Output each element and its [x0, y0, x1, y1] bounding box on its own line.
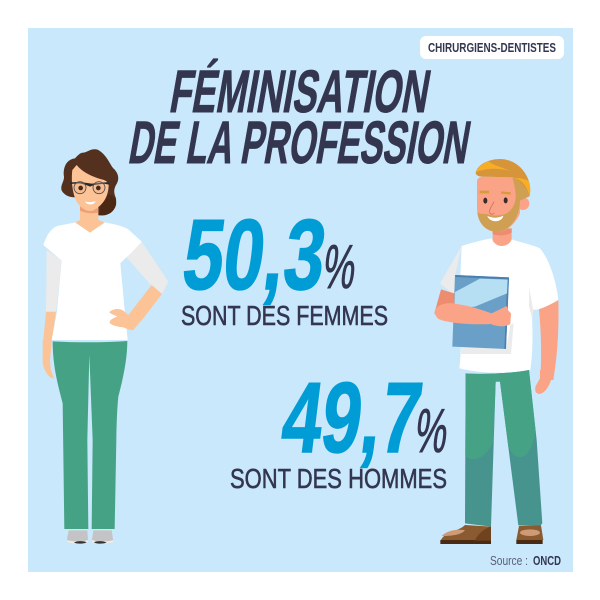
source	[490, 553, 561, 568]
statistic: men	[230, 362, 453, 494]
ear and face	[517, 197, 529, 210]
woman upper body	[43, 149, 168, 340]
statistic: men: 49,7	[276, 362, 428, 474]
statistic: women: %	[319, 233, 361, 302]
statistic: men: %	[411, 397, 453, 466]
source: Source :	[490, 553, 528, 568]
statistic: men: SONT DES HOMMES	[230, 463, 447, 494]
title: FÉMINISATION	[166, 57, 436, 125]
source: ONCD	[533, 553, 561, 568]
illustration: woman	[43, 149, 168, 544]
category badge: CHIRURGIENS-DENTISTES	[428, 40, 556, 55]
beard and sideburn	[477, 177, 530, 232]
man upper body	[434, 159, 559, 380]
category badge	[420, 36, 564, 59]
woman legs	[43, 340, 127, 544]
statistic: women: 50,3	[177, 199, 332, 311]
statistic: women: SONT DES FEMMES	[181, 300, 388, 331]
man legs	[440, 370, 553, 544]
hair	[476, 159, 530, 197]
illustration: man	[434, 159, 559, 544]
title	[125, 57, 476, 176]
